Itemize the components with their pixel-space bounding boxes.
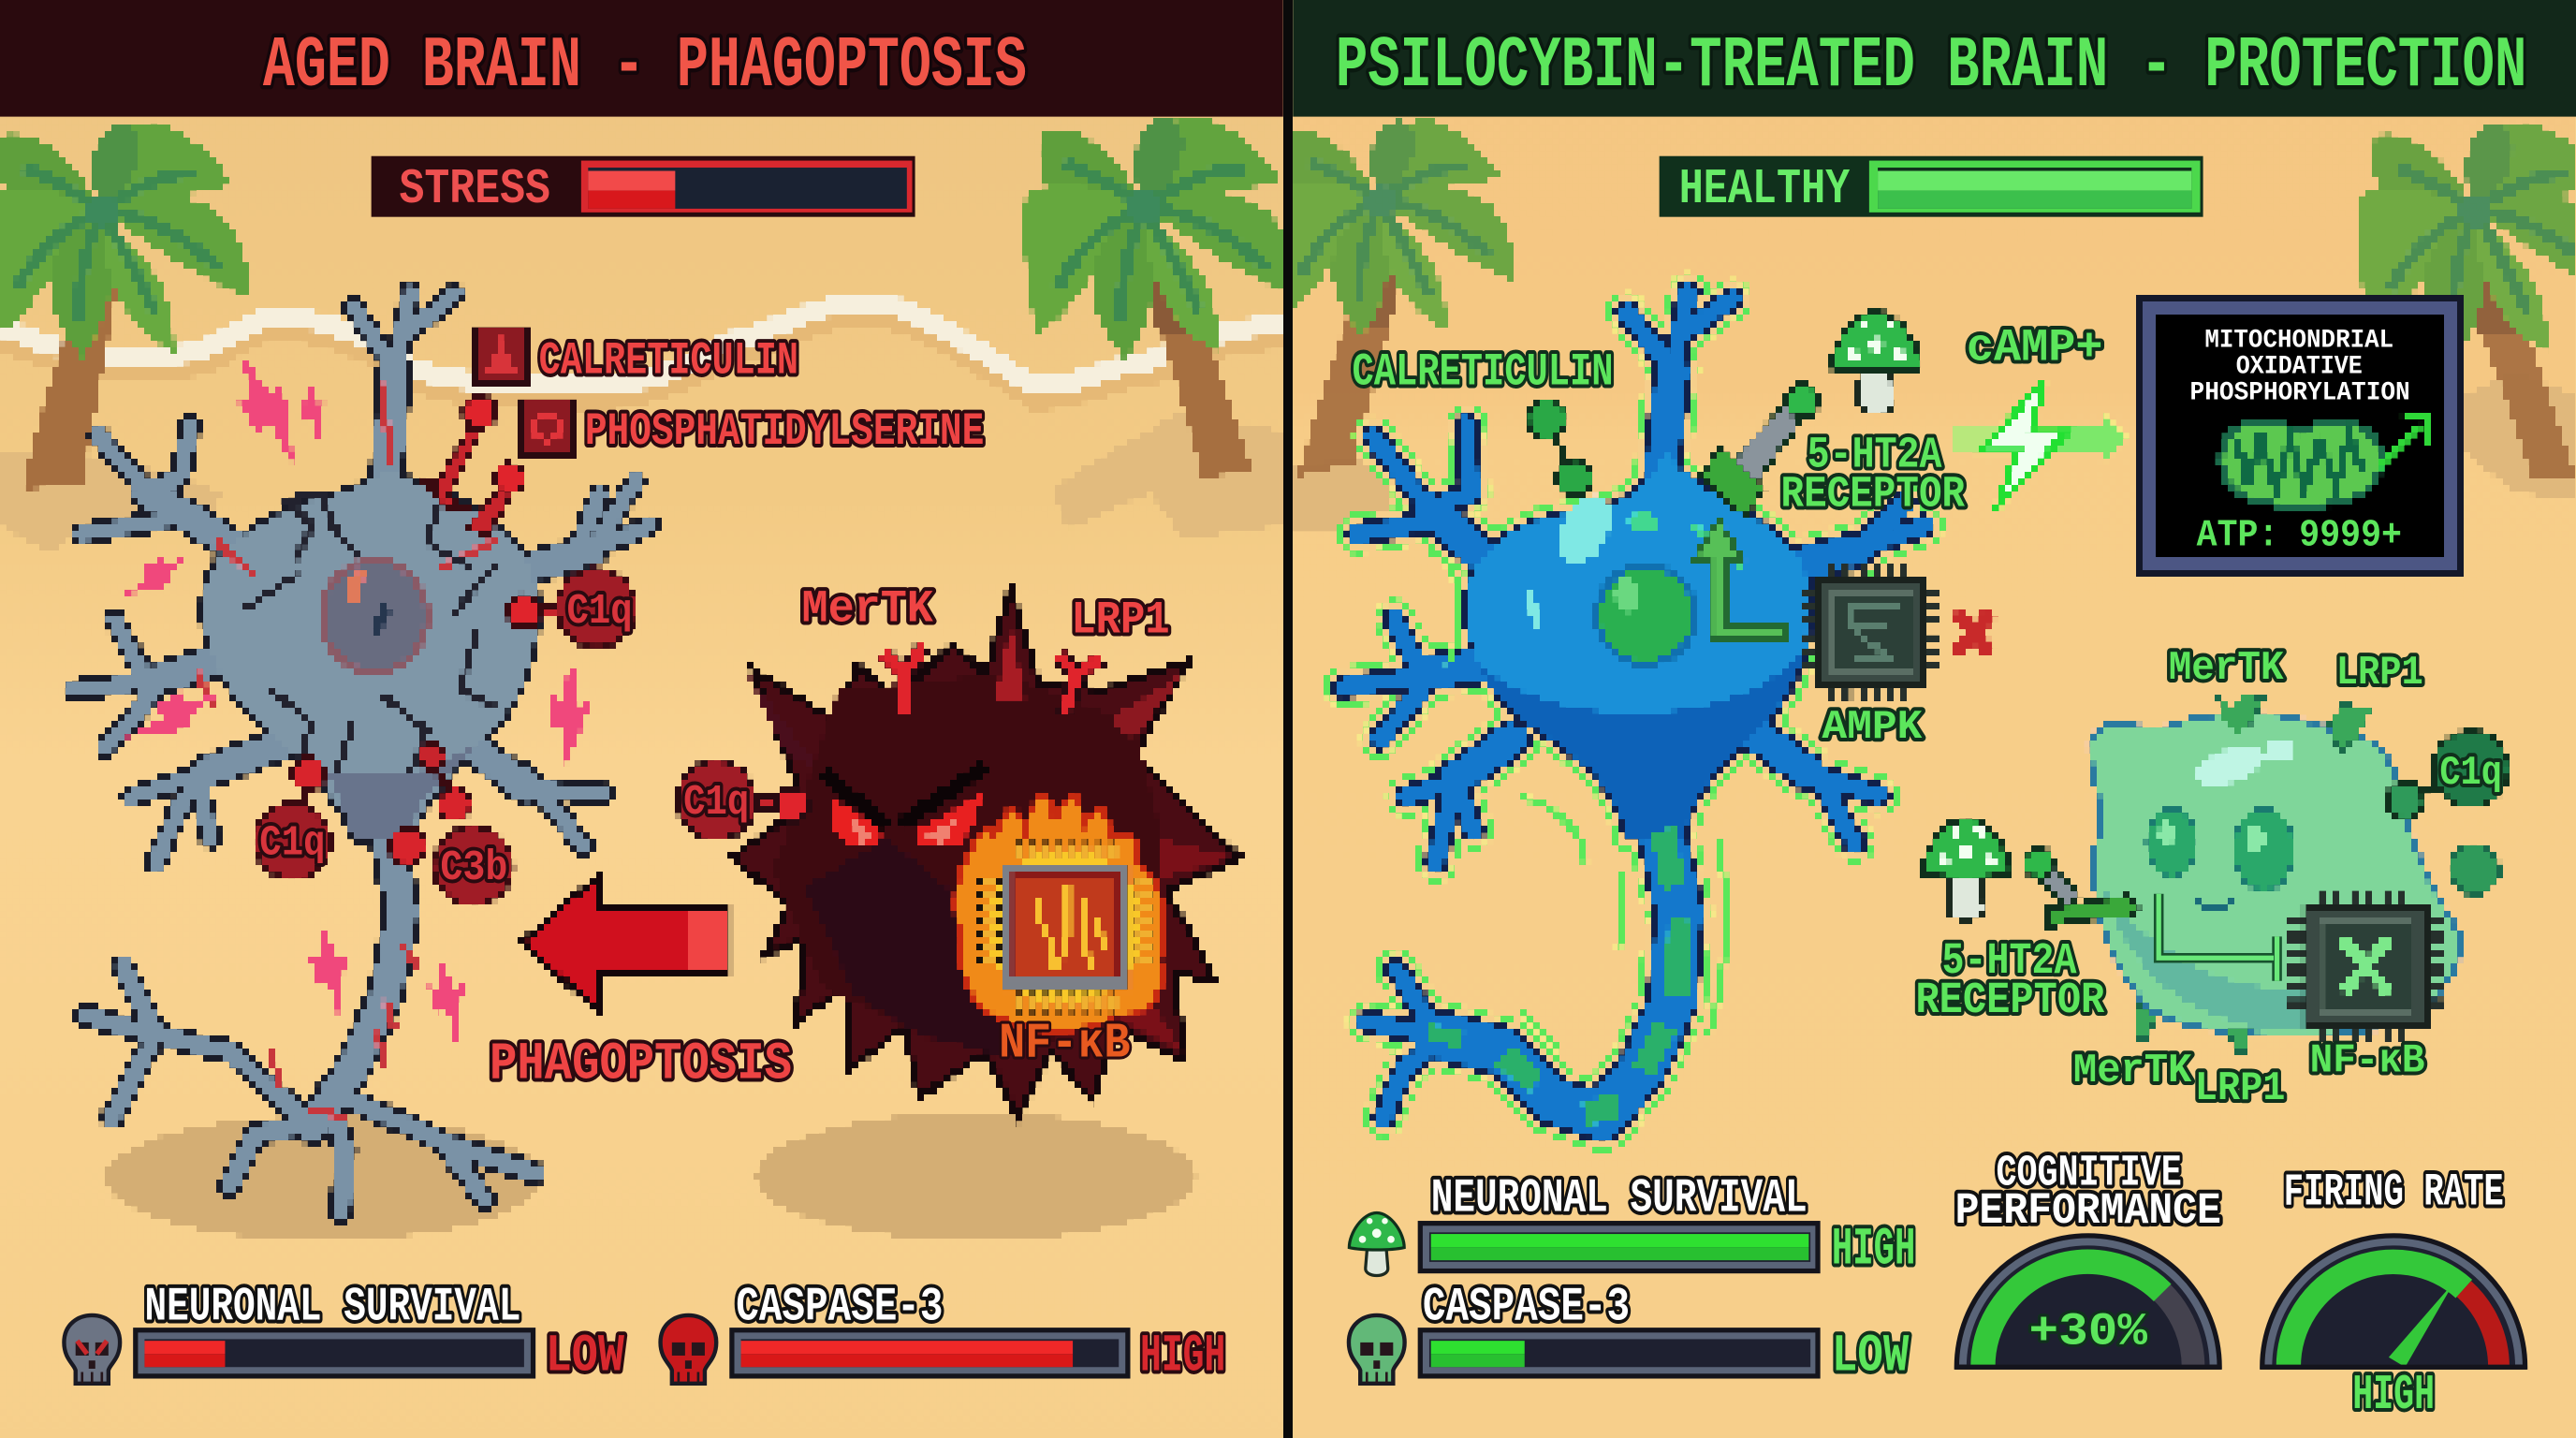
icon: mushroom lower bbox=[1922, 818, 2011, 919]
icon: mushroom top bbox=[1832, 312, 1921, 413]
stat: neuronal survival high: HIGH bbox=[1832, 1220, 1915, 1280]
palm tree right bbox=[1024, 115, 1297, 479]
eyes bbox=[832, 800, 884, 845]
membrane highlights bbox=[1549, 487, 1621, 572]
ocean foam wave bbox=[0, 302, 1283, 403]
mitochondrion bbox=[2221, 421, 2380, 506]
inhibition line bbox=[2159, 894, 2277, 981]
label: ATP: ATP: 9999+ bbox=[2197, 515, 2402, 558]
text: mitochondrial oxidative phosphorylation: MITOCHONDRIAL bbox=[2204, 326, 2393, 355]
stat: caspase-3 low bbox=[1349, 1281, 1910, 1387]
arrow: activation to AMPK bbox=[1719, 550, 1788, 633]
scene: treated brain illustration bbox=[1272, 98, 2576, 1438]
label: 5-HT2A receptor lower: RECEPTOR bbox=[1915, 976, 2105, 1026]
text: mitochondrial oxidative phosphorylation: PHOSPHORYLATION bbox=[2190, 378, 2410, 407]
myelin segments bbox=[1429, 829, 1680, 1114]
center divider bbox=[1283, 0, 1293, 1438]
labels: treated brain bbox=[1349, 156, 2526, 1423]
header: aged brain bbox=[0, 0, 1283, 117]
stress meter: STRESS bbox=[399, 161, 550, 217]
complement proteins on neuron bbox=[255, 396, 636, 905]
label: phagoptosis: PHAGOPTOSIS bbox=[490, 1034, 792, 1093]
stat: caspase-3 low: CASPASE-3 bbox=[1423, 1281, 1630, 1334]
ground shadows bbox=[105, 1112, 1196, 1240]
label: 5-HT2A receptor top bbox=[1781, 431, 1966, 521]
microglia: friendly green cell bbox=[2089, 713, 2461, 1035]
arrow up bbox=[2378, 418, 2430, 466]
bolts: stress sparks bbox=[114, 345, 602, 1044]
gauge: cognitive performance +30%: +30% bbox=[2029, 1306, 2147, 1358]
label: C1q lower: C1q bbox=[259, 819, 326, 868]
stat: neuronal survival low: LOW bbox=[546, 1327, 624, 1387]
gauge: cognitive performance +30%: PERFORMANCE bbox=[1955, 1187, 2221, 1237]
nucleus bbox=[1597, 565, 1695, 664]
gauge: cognitive performance +30%: COGNITIVE bbox=[1996, 1149, 2182, 1198]
glow wisps bbox=[1429, 550, 1726, 1051]
icon: calreticulin badge bbox=[475, 327, 529, 383]
label: LRP1: LRP1 bbox=[1071, 594, 1170, 647]
brows bbox=[822, 766, 986, 825]
stat: caspase-3 high: HIGH bbox=[1140, 1327, 1225, 1387]
5-HT2A receptor on neuron bbox=[1699, 385, 1819, 516]
smile bbox=[2195, 899, 2231, 910]
icon: phosphatidylserine badge bbox=[520, 399, 575, 455]
panel: psilocybin-treated brain bbox=[1272, 0, 2576, 1438]
healthy meter bbox=[1660, 156, 2203, 217]
gauge: firing rate high bbox=[2261, 1166, 2526, 1423]
C1q protein on microglia bbox=[2387, 731, 2509, 894]
microglia receptors MerTK and LRP1 bbox=[882, 646, 1101, 714]
palm shadows bbox=[1293, 372, 2576, 534]
text: mitochondrial oxidative phosphorylation: OXIDATIVE bbox=[2236, 352, 2363, 381]
stat: neuronal survival low bbox=[64, 1281, 624, 1387]
stat: caspase-3 high bbox=[661, 1281, 1225, 1387]
cracks bbox=[246, 493, 493, 772]
arrow: phagoptosis attack bbox=[522, 874, 728, 1014]
label: NF-kB: NF-κB bbox=[2310, 1037, 2425, 1084]
label: cAMP: cAMP+ bbox=[1967, 321, 2103, 374]
label: AMPK: AMPK bbox=[1822, 704, 1923, 751]
label: LRP1 top: LRP1 bbox=[2336, 650, 2423, 697]
microglia: spiky aggressive cell bbox=[731, 588, 1240, 1117]
palm shadows bbox=[0, 414, 1281, 552]
label: C1q: C1q bbox=[2439, 750, 2502, 797]
arrow: cAMP energy bbox=[1955, 378, 2130, 509]
green receptors bbox=[2136, 695, 2372, 1051]
label: 5-HT2A receptor top: 5-HT2A bbox=[1808, 431, 1942, 480]
label: 5-HT2A receptor lower: 5-HT2A bbox=[1942, 937, 2077, 987]
scene: aged brain illustration bbox=[0, 117, 1283, 1239]
icon: inhibited NF-kB chip bbox=[2300, 901, 2432, 1032]
header: treated brain bbox=[1293, 0, 2576, 117]
panel: aged brain bbox=[0, 0, 1297, 1438]
healthy meter: HEALTHY bbox=[1679, 161, 1851, 217]
panel: mitochondria status bbox=[2137, 296, 2463, 579]
label: calreticulin: CALRETICULIN bbox=[539, 334, 798, 387]
stat: neuronal survival high bbox=[1349, 1173, 1915, 1280]
label: LRP1 lower: LRP1 bbox=[2195, 1065, 2285, 1112]
text: mitochondrial oxidative phosphorylation bbox=[2190, 326, 2410, 407]
icon: burning NF-kB chip bbox=[956, 796, 1164, 1031]
gauge: firing rate high: HIGH bbox=[2352, 1367, 2435, 1423]
label: MerTK lower: MerTK bbox=[2073, 1048, 2192, 1094]
label: NF-kB: NF-κB bbox=[999, 1016, 1131, 1072]
label: 5-HT2A receptor top: RECEPTOR bbox=[1781, 471, 1966, 521]
stat: caspase-3 high: CASPASE-3 bbox=[736, 1281, 943, 1334]
stress meter bbox=[372, 156, 915, 217]
stat: neuronal survival low: NEURONAL SURVIVAL bbox=[144, 1281, 520, 1334]
label: C3b: C3b bbox=[440, 844, 507, 892]
label: phosphatidylserine: PHOSPHATIDYLSERINE bbox=[585, 405, 984, 458]
eyes bbox=[2147, 809, 2197, 877]
icon: AMPK chip bbox=[1815, 575, 1931, 690]
title: AGED BRAIN - PHAGOPTOSIS bbox=[263, 26, 1027, 108]
label: C1q microglia: C1q bbox=[683, 778, 749, 827]
nucleus bbox=[322, 560, 427, 672]
C1q on microglia bbox=[677, 761, 809, 840]
arrow: activation line bbox=[1719, 559, 1784, 633]
label: MerTK top: MerTK bbox=[2169, 645, 2284, 692]
gauge: cognitive performance +30% bbox=[1955, 1149, 2221, 1367]
5-HT2A receptor on microglia bbox=[2024, 848, 2139, 929]
calreticulin proteins bbox=[1528, 399, 1592, 496]
palm tree right bbox=[2358, 122, 2576, 477]
neuron: healthy glowing blue neuron bbox=[1344, 292, 1924, 1117]
label: MerTK: MerTK bbox=[801, 582, 933, 635]
palm tree left bbox=[0, 122, 250, 490]
palm tree left bbox=[1272, 119, 1516, 477]
label: calreticulin: CALRETICULIN bbox=[1352, 346, 1614, 399]
neuron: damaged grey neuron bbox=[74, 292, 649, 1212]
label: 5-HT2A receptor lower bbox=[1915, 937, 2105, 1026]
stat: caspase-3 low: LOW bbox=[1832, 1327, 1910, 1387]
icon: red X bbox=[1955, 613, 1991, 653]
arrow: activation head bbox=[1694, 520, 1743, 560]
stat: neuronal survival high: NEURONAL SURVIVAL bbox=[1431, 1173, 1808, 1226]
labels: aged brain bbox=[64, 156, 1225, 1387]
label: C1q right: C1q bbox=[567, 587, 633, 636]
